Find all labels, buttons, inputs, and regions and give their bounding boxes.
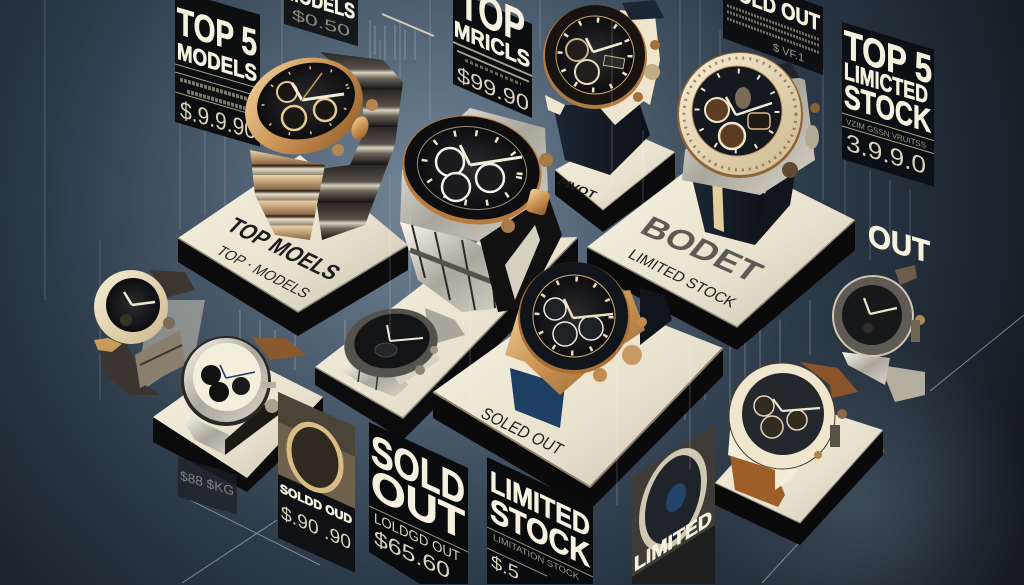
text: pivot: PIVOT [556,176,599,202]
panel: sign limited stock: LIMITED [490,465,590,544]
panel: sign top 5 limited stock: LIMICTED [844,58,928,110]
panel: sign top 5 limited stock: 3.9.9.0 [846,130,926,180]
icon: navy strap chronograph [543,0,664,175]
panel: sign top 5 limited stock: STOCK [844,77,931,141]
panel: sign limited with watch: LIMITED [634,505,712,576]
panel: ghost price sign [178,457,237,515]
shadow under right small watch [880,365,925,402]
panel: platform under left-most top watch [178,155,408,336]
panel: sold watch image sign [278,392,355,573]
panel: platform sold out [433,290,723,510]
icon: gold case chronograph with navy strap [505,262,672,428]
icon: steel watch on sign [642,436,704,563]
panel: sign sold out [369,422,468,584]
panel: platform bottom right [715,400,883,545]
panel: sign models top: $0.50 [292,7,350,41]
panel: sign top 5 limited stock: TOP 5 [844,21,932,93]
text: top moels: TOP MOELS [221,214,346,284]
icon: gold chronograph with bracelet [232,43,403,240]
shadow under left small watch [135,300,205,395]
panel: platform centre [315,237,578,440]
icon: dark steel watch [339,301,465,397]
panel: sign top 5 models: MODELS [177,38,257,87]
panel: sign limited stock: $.5 [491,552,519,585]
panel: sign sold out: OUT [371,460,465,550]
text: out: OUT [868,217,930,270]
panel: sign top 5 models: TOP 5 [177,0,257,66]
panel: sign top metrics: $99.90 [457,62,529,116]
panel: sign top 5 limited stock: VZIM GSSN VRUITSS [846,117,927,150]
panel: sign top metrics: MRICLS [454,15,530,73]
panel: sign top 5 limited stock [842,21,934,187]
thin overlay lines [390,20,690,505]
panel: sign limited with watch [632,425,715,584]
icon: white dial chronograph [181,336,307,455]
panel: sold watch image sign: $.90 .90 [281,502,351,555]
decorative bar label [382,14,434,36]
panel: sign top 5 models: $.9.9.90 [180,97,256,145]
text: limited stock platform: LIMITED STOCK [625,247,739,311]
panel: sign sold out top: $ VF.1 [773,42,804,65]
text: bodet: BODET [634,211,770,289]
panel: sign limited stock: LIMITATION STOCK [493,532,580,583]
icon: gold ring watch [289,417,341,497]
icon: cream bezel chronograph with navy strap [677,52,820,245]
text: top models small: TOP ⋅ MODELS [212,244,314,301]
panel: sign top 5 models [175,0,260,147]
panel: platform rear right [555,130,675,232]
panel: platform limited stock [587,160,855,350]
icon: cream bezel watch with tan strap [728,362,858,507]
panel: sign sold out: $65.60 [374,525,450,584]
panel: sign sold out top [723,0,823,75]
icon: small right watch [832,265,925,385]
panel: sign top metrics [453,0,532,118]
panel: sign models top [284,0,358,46]
panel: sign sold out: LOLDGD OUT [374,511,460,566]
icon: small left watch [94,270,195,395]
panel: sold watch image sign: SOLDD OUD [280,481,352,527]
panel: sign limited stock: STOCK [490,492,590,575]
panel: ghost price sign: $88 $KG [180,468,234,499]
panel: platform bottom left [153,355,323,492]
panel: sign sold out: SOLD [371,426,465,516]
text: soled out: SOLED OUT [478,404,567,460]
icon: black bezel chronograph with steel bracelet [394,105,562,312]
panel: sign limited stock [487,457,593,585]
